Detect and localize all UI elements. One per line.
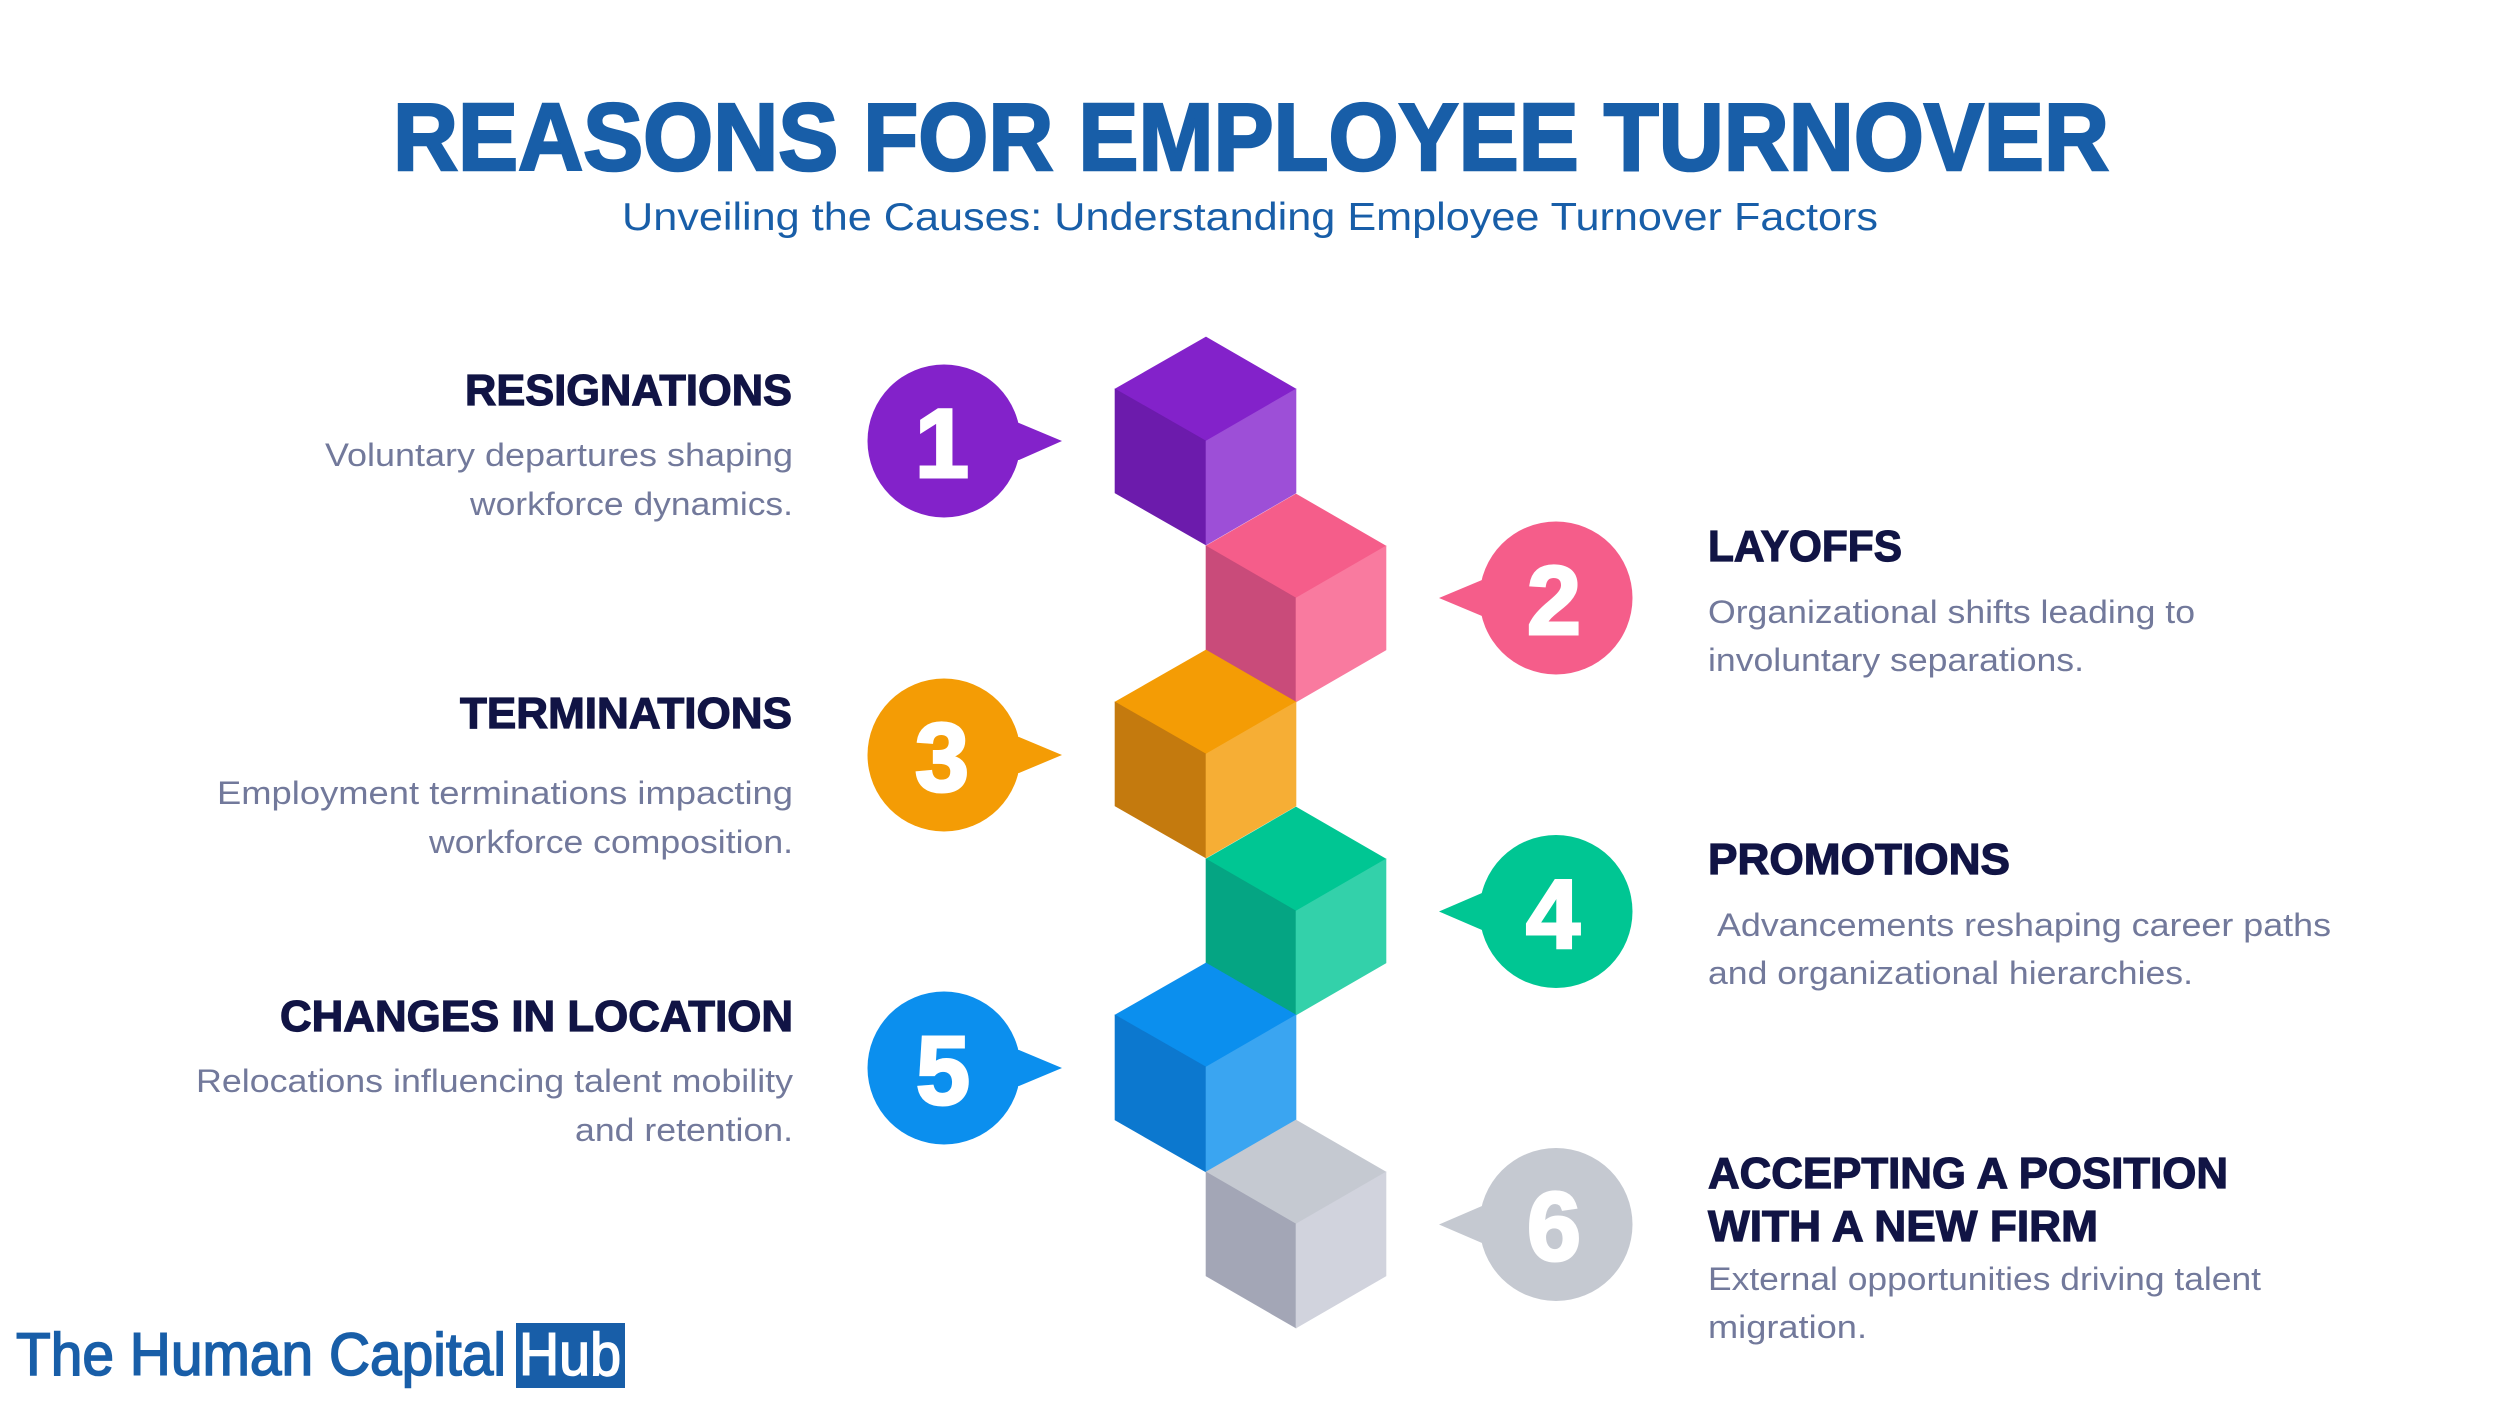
item: changes in location: and retention. xyxy=(575,1112,793,1148)
badge 4: 4 xyxy=(1526,860,1580,968)
item: layoffs: LAYOFFS xyxy=(1708,522,1902,571)
badge 1: 1 xyxy=(915,389,969,498)
item: layoffs xyxy=(1708,522,2195,678)
item: promotions: and organizational hierarchies. xyxy=(1708,955,2193,991)
badge 6: 6 xyxy=(1527,1172,1581,1281)
item: changes in location xyxy=(196,992,793,1148)
item: accepting a position: ACCEPTING A POSITION xyxy=(1708,1149,2228,1198)
item: accepting a position: WITH A NEW FIRM xyxy=(1708,1202,2098,1251)
cube 2 pink xyxy=(1206,494,1386,702)
item: promotions xyxy=(1708,835,2331,991)
cube 4 green xyxy=(1206,807,1386,1015)
subtitle: Unveiling the Causes: Understanding Employee Turnover Factors xyxy=(622,196,1878,239)
item: resignations: RESIGNATIONS xyxy=(465,366,792,415)
badge 5 xyxy=(868,992,1062,1144)
cube 5 blue xyxy=(1115,963,1296,1172)
item: resignations: workforce dynamics. xyxy=(469,486,793,522)
item: layoffs: Organizational shifts leading to xyxy=(1708,594,2195,630)
badge 3 xyxy=(868,678,1062,832)
item: layoffs: involuntary separations. xyxy=(1708,642,2084,678)
badge 4 xyxy=(1439,835,1632,988)
cube 1 purple xyxy=(1115,337,1296,545)
logo: Hub xyxy=(519,1321,621,1388)
badge 3: 3 xyxy=(915,703,969,812)
item: terminations: workforce composition. xyxy=(428,824,793,860)
item: accepting a position: External opportunities driving talent xyxy=(1708,1261,2261,1297)
item: resignations: Voluntary departures shaping xyxy=(325,437,793,473)
cube 3 orange xyxy=(1115,650,1296,858)
badge 1 xyxy=(868,364,1062,518)
item: resignations xyxy=(325,366,793,522)
item: accepting a position xyxy=(1708,1149,2261,1345)
item: changes in location: CHANGES IN LOCATION xyxy=(280,992,793,1041)
logo: The Human Capital xyxy=(16,1321,506,1388)
title: REASONS FOR EMPLOYEE TURNOVER xyxy=(393,84,2109,191)
badge 6 xyxy=(1439,1148,1632,1301)
item: promotions: Advancements reshaping career paths xyxy=(1717,907,2331,943)
item: accepting a position: migration. xyxy=(1708,1309,1867,1345)
badge 2: 2 xyxy=(1527,546,1581,655)
item: terminations xyxy=(217,689,793,860)
item: terminations: Employment terminations impacting xyxy=(217,775,793,811)
cube 6 gray xyxy=(1206,1120,1386,1328)
item: changes in location: Relocations influencing talent mobility xyxy=(196,1063,793,1099)
item: promotions: PROMOTIONS xyxy=(1708,835,2010,884)
badge 5: 5 xyxy=(916,1016,970,1125)
item: terminations: TERMINATIONS xyxy=(460,689,792,738)
badge 2 xyxy=(1439,522,1632,674)
